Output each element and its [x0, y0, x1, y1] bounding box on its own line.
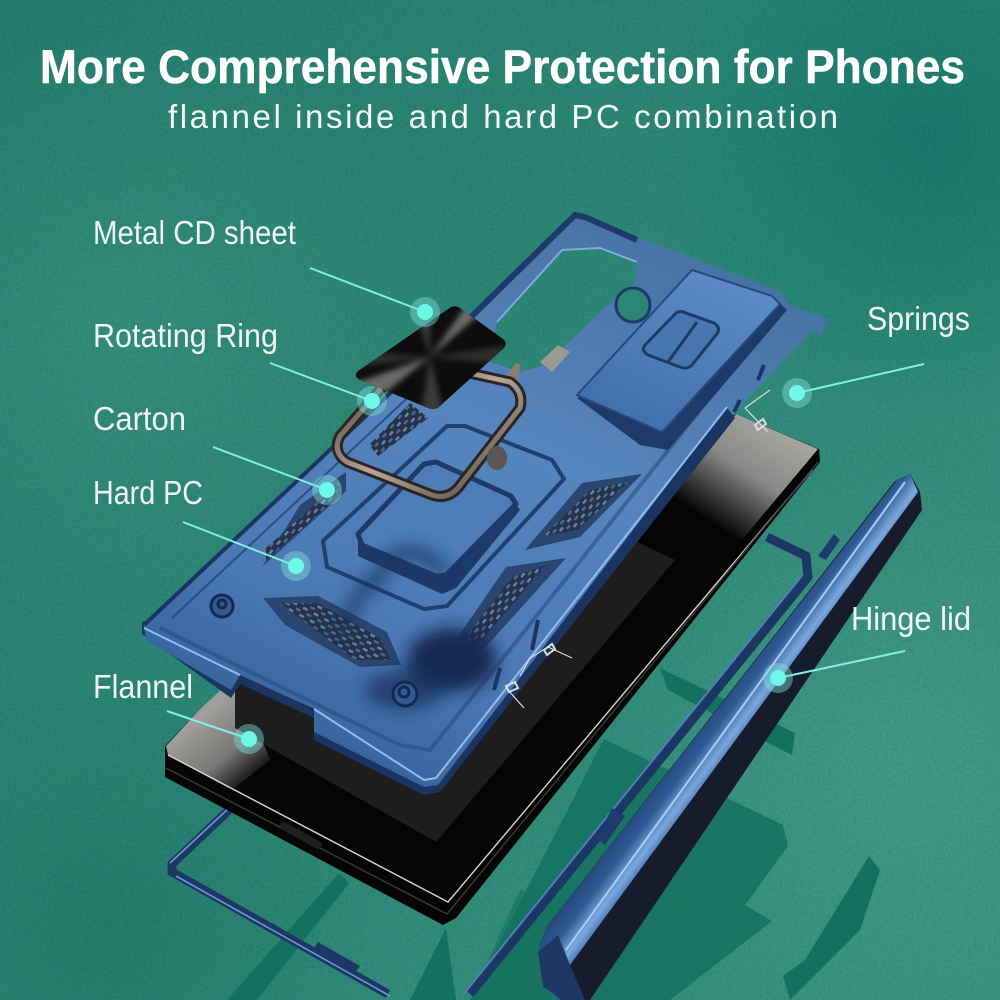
subtitle: flannel inside and hard PC combination — [168, 98, 838, 135]
rotating ring — [337, 361, 521, 496]
title: More Comprehensive Protection for Phones — [40, 40, 965, 93]
metal CD sheet — [356, 306, 506, 410]
label: Hinge lid: Hinge lid — [851, 600, 971, 637]
dot: carton — [312, 475, 342, 505]
carbon pad top — [369, 403, 428, 456]
back frame rail — [170, 537, 808, 996]
floor shadows of the parts — [227, 668, 880, 1000]
carbon pad bottom — [263, 596, 401, 667]
label: Metal CD sheet: Metal CD sheet — [93, 214, 296, 251]
label: Flannel: Flannel — [93, 668, 193, 705]
label: Carton: Carton — [93, 400, 186, 437]
callout dots — [234, 297, 812, 754]
dot: metal CD sheet — [410, 297, 440, 327]
leader lines — [167, 268, 924, 739]
screws — [211, 595, 417, 706]
main case: hard PC — [144, 215, 828, 787]
dot: flannel — [234, 724, 264, 754]
case dark side — [142, 405, 735, 795]
dot: hard PC — [281, 551, 311, 581]
label: Rotating Ring: Rotating Ring — [93, 317, 278, 354]
phone body — [165, 414, 820, 925]
label: Hard PC: Hard PC — [93, 474, 203, 511]
dot: rotating ring — [357, 386, 387, 416]
carbon pads — [262, 403, 642, 667]
camera block with lens square — [358, 462, 520, 594]
octagon raised outline — [323, 426, 564, 609]
carbon pad left: carton — [262, 472, 346, 567]
springs and side clips — [494, 365, 770, 708]
carbon pad right — [525, 474, 642, 550]
dot: hinge lid — [763, 663, 793, 693]
camera slider — [577, 270, 787, 450]
dot: springs — [782, 378, 812, 408]
carbon pad lower right — [447, 558, 566, 653]
label: Springs: Springs — [867, 300, 970, 337]
shadow of ring on case — [335, 552, 497, 710]
hinge lid — [538, 474, 922, 1000]
